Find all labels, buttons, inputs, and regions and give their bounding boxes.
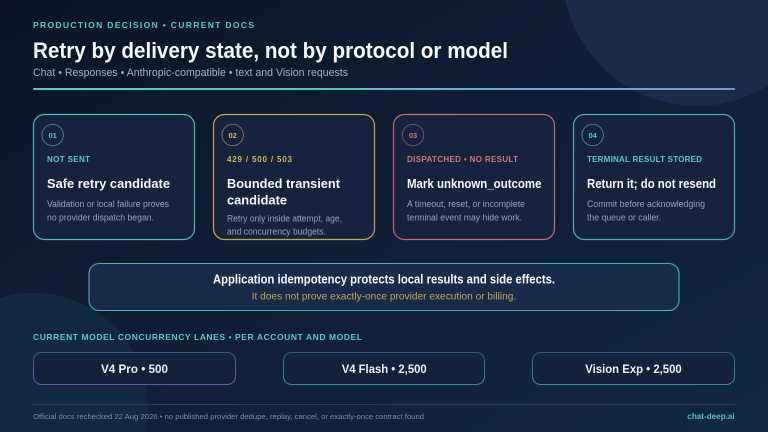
body text: [47, 199, 169, 222]
footer brand: chat-deep.ai: [687, 412, 735, 421]
title: Retry by delivery state, not by protocol or model: [33, 38, 508, 63]
label: TERMINAL RESULT STORED: [587, 155, 702, 164]
body text: A timeout, reset, or incomplete: [407, 199, 525, 209]
heading: [227, 176, 341, 208]
header: [33, 20, 508, 79]
subtitle: Chat • Responses • Anthropic-compatible • text and Vision requests: [33, 67, 348, 79]
lane: Vision Exp: [532, 352, 734, 384]
icon: step 03: 03: [409, 131, 417, 140]
body text: the queue or caller.: [587, 212, 661, 222]
icon: step 04: 04: [589, 131, 598, 140]
icon: step 03: [402, 124, 424, 146]
body text: no provider dispatch began.: [47, 212, 154, 222]
lane: V4 Flash: V4 Flash • 2,500: [342, 364, 427, 376]
body text: and concurrency budgets.: [227, 226, 326, 236]
body text: Validation or local failure proves: [47, 199, 169, 209]
heading: Mark unknown_outcome: [407, 176, 542, 191]
icon: step 01: [42, 124, 63, 146]
body text: [587, 199, 705, 222]
body text: [227, 214, 342, 236]
heading: Safe retry candidate: [47, 176, 170, 191]
heading: Return it; do not resend: [587, 176, 716, 191]
section heading: concurrency lanes: CURRENT MODEL CONCURRENCY LANES • PER ACCOUNT AND MODEL: [33, 332, 362, 342]
body text: Commit before acknowledging: [587, 199, 705, 209]
panel: not sent: [34, 114, 194, 240]
panel: terminal result stored: [574, 114, 734, 240]
eyebrow: PRODUCTION DECISION • CURRENT DOCS: [33, 20, 254, 30]
callout: idempotency: [89, 264, 679, 310]
lane: Vision Exp: Vision Exp • 2,500: [585, 364, 682, 376]
heading: candidate: [227, 192, 287, 208]
icon: step 04: [582, 124, 603, 146]
lane: V4 Pro: [34, 352, 236, 384]
lane: V4 Flash: [284, 352, 484, 384]
callout heading: Application idempotency protects local results and side effects.: [213, 272, 555, 286]
footer note: Official docs rechecked 22 Aug 2026 • no published provider dedupe, replay, cancel, or exactly-once contract found: [33, 412, 424, 421]
lane: V4 Pro: V4 Pro • 500: [101, 364, 168, 376]
body text: Retry only inside attempt, age,: [227, 214, 342, 224]
label: NOT SENT: [47, 155, 90, 164]
icon: step 02: 02: [229, 131, 237, 140]
panel: transient status codes: [214, 114, 374, 240]
icon: step 02: [222, 124, 243, 146]
heading: Bounded transient: [227, 176, 341, 191]
label: 429 / 500 / 503: [227, 155, 293, 164]
body text: terminal event may hide work.: [407, 212, 522, 222]
body text: [407, 199, 525, 222]
icon: step 01: 01: [49, 131, 57, 140]
label: DISPATCHED • NO RESULT: [407, 155, 518, 164]
callout note: It does not prove exactly-once provider execution or billing.: [252, 292, 516, 302]
accent rule: [33, 88, 735, 90]
panel: dispatched no result: [394, 114, 554, 240]
